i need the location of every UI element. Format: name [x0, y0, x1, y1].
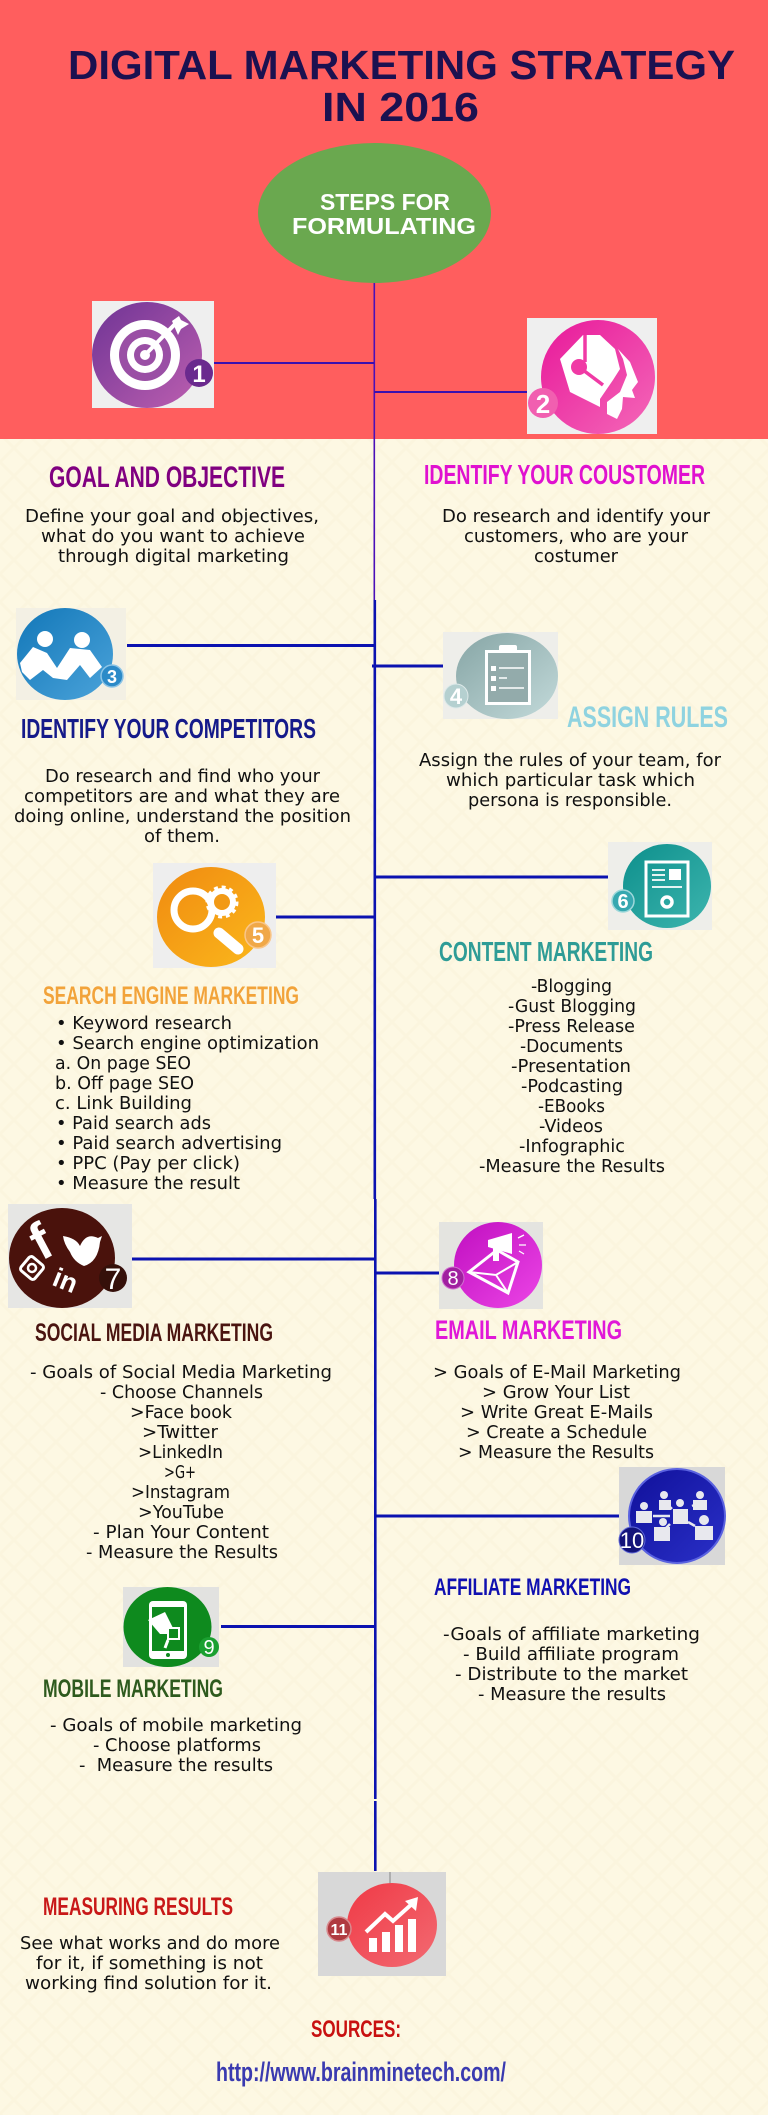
oval: steps for formulating: STEPS FOR — [320, 189, 450, 215]
text: measuring description: for it, if something is not — [36, 1953, 263, 1974]
icon: envelope and megaphone: 8 — [447, 1268, 459, 1290]
text: goal description: what do you want to achieve — [41, 526, 305, 547]
list: social media tasks: >YouTube — [138, 1502, 224, 1523]
list: social media tasks: - Goals of Social Media Marketing — [30, 1362, 332, 1383]
list: mobile tasks: - Choose platforms — [93, 1735, 261, 1756]
text: rules description: persona is responsible. — [468, 790, 672, 811]
panel: step 7 social media marketing — [8, 1204, 332, 1563]
text: rules description — [419, 750, 722, 811]
icon: rising chart — [318, 1872, 446, 1976]
icon: head with headset — [527, 318, 657, 434]
panel: step 4 assign rules — [419, 632, 728, 811]
text: customer description: Do research and identify your — [442, 506, 711, 527]
list: content types: -Documents — [520, 1036, 623, 1057]
heading: sources: SOURCES: — [311, 2016, 401, 2043]
list: affiliate tasks — [443, 1624, 700, 1705]
text: goal description: Define your goal and objectives, — [25, 506, 319, 527]
text: source url: http://www.brainminetech.com/ — [216, 2057, 506, 2087]
icon: document with gear — [608, 842, 712, 930]
text: competitors description — [14, 766, 351, 847]
list: mobile tasks: - Measure the results — [79, 1755, 273, 1776]
icon: network of people: 10 — [620, 1528, 644, 1553]
connector: step 9 — [221, 1625, 374, 1628]
connector: step 6 — [375, 876, 608, 878]
list: email tasks: > Create a Schedule — [466, 1422, 647, 1443]
header band — [0, 0, 768, 439]
panel: step 6 content marketing — [439, 842, 712, 1177]
text: goal description: through digital marketing — [58, 546, 289, 567]
icon: phone with megaphone — [123, 1587, 219, 1667]
list: email tasks: > Goals of E-Mail Marketing — [433, 1362, 681, 1383]
list: content types: -EBooks — [538, 1096, 605, 1117]
list: content types: -Presentation — [511, 1056, 631, 1077]
connector: step 8 — [375, 1272, 443, 1274]
text: customer description: customers, who are your — [464, 526, 689, 547]
icon: social networks: in — [49, 1262, 82, 1299]
list: search engine tasks: • PPC (Pay per click) — [56, 1153, 240, 1174]
text: competitors description: doing online, understand the position — [14, 806, 351, 827]
icon: rising chart: 11 — [331, 1922, 348, 1939]
text: customer description: costumer — [534, 546, 619, 567]
icon: target: 1 — [192, 361, 206, 388]
connector: step 2 — [374, 391, 527, 393]
connector: step 10 — [375, 1514, 620, 1518]
panel: step 2 identify your customer — [424, 318, 711, 567]
list: content types: -Blogging — [531, 976, 612, 997]
text: competitors description: of them. — [144, 826, 220, 847]
text: competitors description: competitors are and what they are — [24, 786, 340, 807]
list: email tasks: > Write Great E-Mails — [460, 1402, 653, 1423]
connector: step 3 — [127, 644, 374, 647]
panel: step 3 identify your competitors — [14, 608, 351, 847]
list: content types: -Videos — [539, 1116, 603, 1137]
list: content types: -Press Release — [508, 1016, 635, 1037]
list: search engine tasks: b. Off page SEO — [55, 1073, 194, 1094]
heading: identify your competitors: IDENTIFY YOUR COMPETITORS — [21, 713, 316, 744]
list: search engine tasks: a. On page SEO — [55, 1053, 191, 1074]
icon: phone with megaphone: 9 — [203, 1637, 215, 1659]
list: search engine tasks: • Paid search advertising — [56, 1133, 282, 1154]
heading: social media marketing: SOCIAL MEDIA MARKETING — [35, 1319, 273, 1347]
icon: target — [92, 301, 214, 408]
list: search engine tasks: • Keyword research — [56, 1013, 232, 1034]
panel: step 9 mobile marketing — [43, 1587, 302, 1776]
list: search engine tasks: • Measure the result — [56, 1173, 240, 1194]
panel: step 10 affiliate marketing — [434, 1467, 725, 1705]
text: measuring description: See what works and do more — [20, 1933, 280, 1954]
heading: search engine marketing: SEARCH ENGINE MARKETING — [43, 982, 299, 1010]
icon: network of people — [619, 1467, 725, 1565]
connector: step 5 — [276, 916, 374, 918]
title: IN 2016 — [322, 84, 479, 130]
list: email tasks — [433, 1362, 681, 1463]
list: search engine tasks: • Paid search ads — [56, 1113, 211, 1134]
title: DIGITAL MARKETING STRATEGY — [68, 42, 735, 88]
icon: clipboard: 4 — [450, 684, 463, 709]
list: content types: -Infographic — [519, 1136, 625, 1157]
list: social media tasks — [30, 1362, 332, 1563]
text: measuring description — [20, 1933, 280, 1994]
connector: step 4 — [372, 664, 443, 668]
list: email tasks: > Measure the Results — [458, 1442, 654, 1463]
list: search engine tasks: • Search engine optimization — [56, 1033, 319, 1054]
icon: social networks: f — [20, 1212, 63, 1272]
text: measuring description: working find solution for it. — [25, 1973, 272, 1994]
icon: magnifier and gear: 5 — [252, 923, 264, 948]
list: mobile tasks: - Goals of mobile marketing — [50, 1715, 302, 1736]
heading: affiliate marketing: AFFILIATE MARKETING — [434, 1574, 631, 1601]
icon: social networks: 7 — [105, 1263, 121, 1296]
heading: content marketing: CONTENT MARKETING — [439, 936, 653, 967]
text: rules description: which particular task which — [446, 770, 695, 791]
list: social media tasks: >Instagram — [131, 1482, 230, 1503]
connector: step 7 — [132, 1258, 374, 1260]
icon: clipboard — [443, 632, 558, 719]
icon: document with gear: 6 — [617, 891, 629, 913]
heading: email marketing: EMAIL MARKETING — [435, 1315, 622, 1345]
text: competitors description: Do research and find who your — [45, 766, 321, 787]
list: social media tasks: >LinkedIn — [138, 1442, 223, 1463]
oval: steps for formulating — [258, 143, 491, 283]
central timeline — [374, 283, 377, 1871]
oval: steps for formulating: FORMULATING — [292, 213, 476, 239]
list: affiliate tasks: - Build affiliate program — [463, 1644, 679, 1665]
panel: step 8 email marketing — [433, 1222, 681, 1463]
heading: mobile marketing: MOBILE MARKETING — [43, 1675, 223, 1703]
list: content types: -Measure the Results — [479, 1156, 665, 1177]
list: social media tasks: >Twitter — [142, 1422, 219, 1443]
heading: measuring results: MEASURING RESULTS — [43, 1893, 233, 1921]
list: content types: -Gust Blogging — [508, 996, 636, 1017]
connector: step 1 — [214, 362, 374, 364]
list: email tasks: > Grow Your List — [482, 1382, 630, 1403]
icon: social networks — [8, 1204, 132, 1308]
icon: people: 3 — [107, 667, 117, 687]
list: affiliate tasks: - Measure the results — [478, 1684, 666, 1705]
list: content types — [479, 976, 665, 1177]
text: goal description — [25, 506, 319, 567]
list: mobile tasks — [50, 1715, 302, 1776]
icon: envelope and megaphone — [439, 1222, 543, 1309]
panel: step 1 goal and objective — [25, 301, 319, 567]
list: search engine tasks — [55, 1013, 319, 1194]
list: social media tasks: - Choose Channels — [100, 1382, 263, 1403]
panel: step 11 measuring results — [20, 1872, 446, 1994]
list: affiliate tasks: - Distribute to the market — [455, 1664, 688, 1685]
list: social media tasks: - Measure the Results — [86, 1542, 278, 1563]
list: social media tasks: >G+ — [164, 1462, 196, 1483]
title — [68, 42, 735, 130]
icon: head with headset: 2 — [536, 389, 550, 419]
icon: magnifier and gear — [153, 863, 276, 968]
panel: step 5 search engine marketing — [43, 863, 319, 1194]
list: affiliate tasks: -Goals of affiliate marketing — [443, 1624, 700, 1645]
heading: goal and objective: GOAL AND OBJECTIVE — [49, 461, 285, 494]
icon: people — [16, 608, 126, 700]
list: social media tasks: >Face book — [130, 1402, 233, 1423]
list: social media tasks: - Plan Your Content — [93, 1522, 269, 1543]
text: customer description — [442, 506, 711, 567]
list: content types: -Podcasting — [521, 1076, 623, 1097]
list: search engine tasks: c. Link Building — [55, 1093, 192, 1114]
text: rules description: Assign the rules of your team, for — [419, 750, 722, 771]
